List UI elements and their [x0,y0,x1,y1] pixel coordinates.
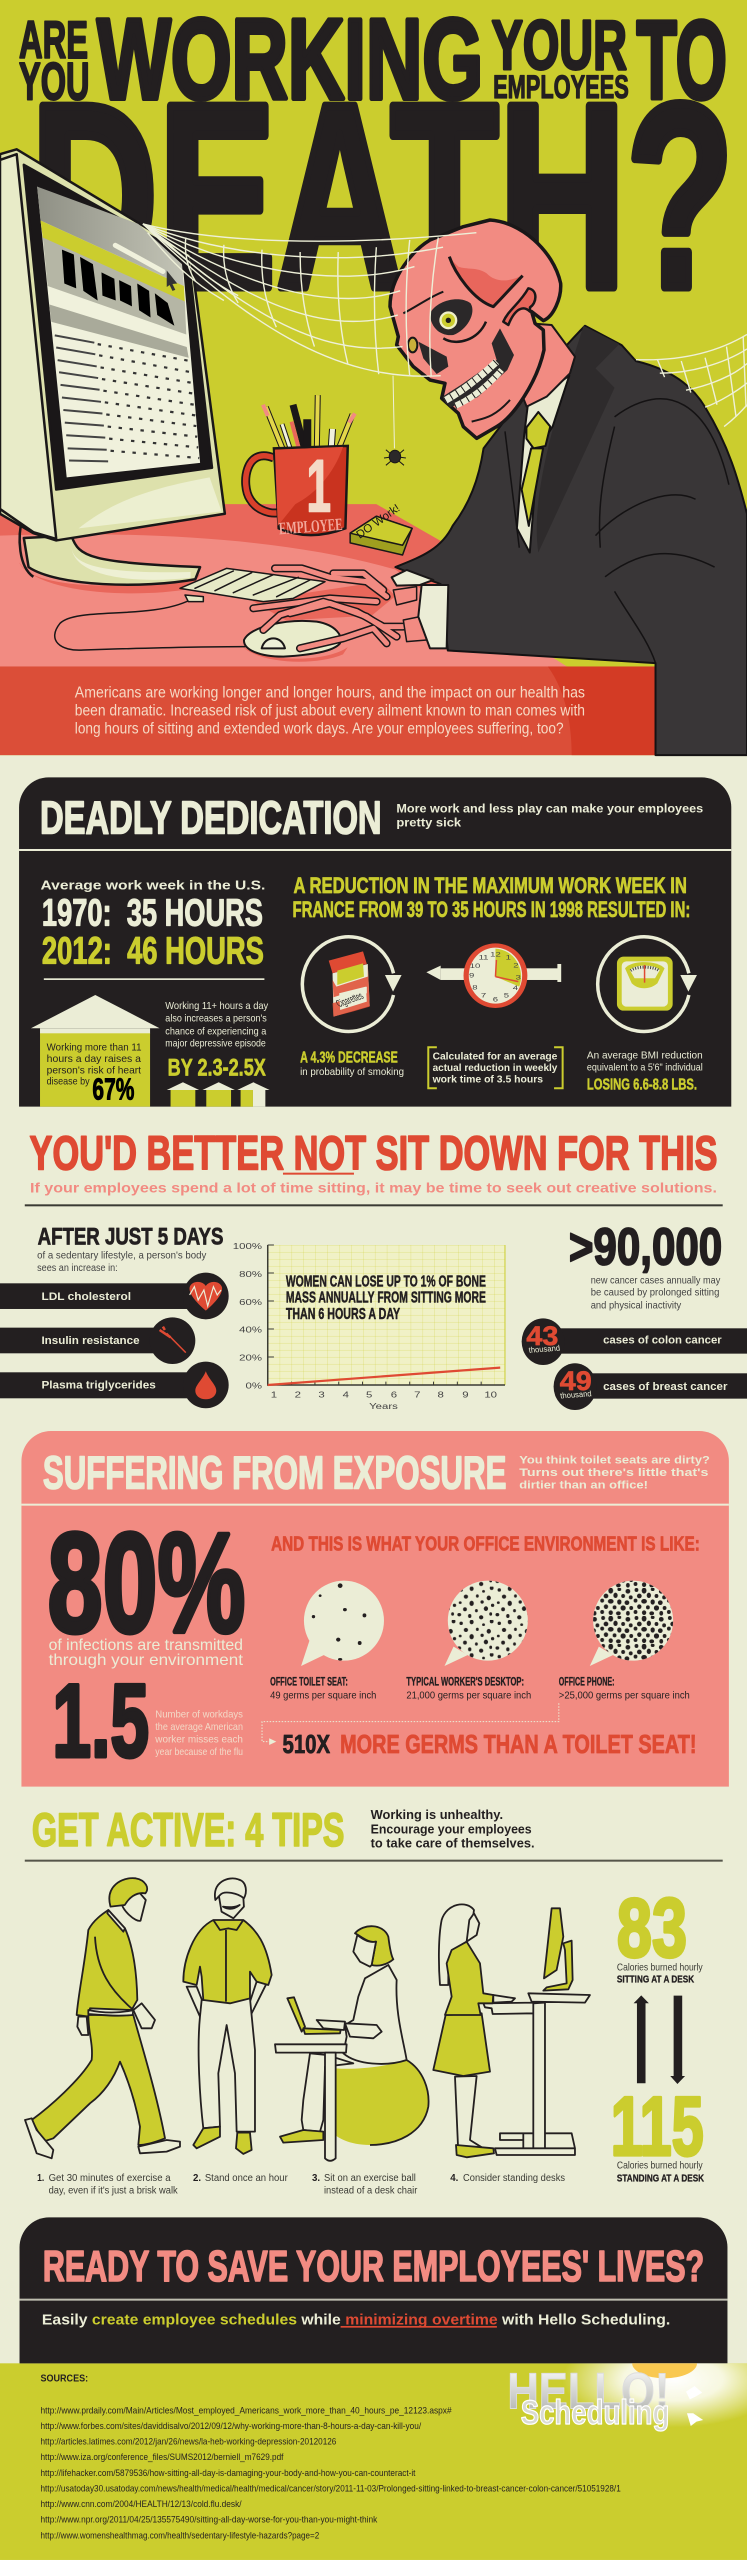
skull and neck [390,220,575,438]
icon: sticky note stack: DO Work! [355,502,402,541]
intro text: long hours of sitting and extended work days. Are your employees suffering, too? [75,720,564,737]
icon: clock with double arrow: 6 [493,996,499,1003]
cancer text: and physical inactivity [591,1299,682,1311]
sources list: http://www.npr.org/2011/04/25/135575490/sitting-all-day-worse-for-you-than-you-might-think [40,2515,377,2525]
intro text: Americans are working longer and longer hours, and the impact on our health has [75,684,585,702]
tips captions: Consider standing desks [463,2171,565,2183]
chart: bone mass loss: Years [369,1402,398,1411]
icon: clock with double arrow: 4 [513,984,519,992]
chart: bone mass loss: 3 [318,1391,325,1400]
ball outline [370,2060,429,2145]
flu text: the average American [155,1721,243,1732]
depression text: Working 11+ hours a day [165,1000,269,1011]
intro text [75,684,585,737]
sources list: http://www.cnn.com/2004/HEALTH/12/13/cold.flu.desk/ [40,2500,242,2509]
icon: clock with double arrow [426,943,561,1008]
blouse [445,1942,493,2015]
upper teeth [445,362,497,401]
house arrow: heart disease: disease by [47,1075,90,1087]
bubble captions: OFFICE PHONE: [559,1676,615,1689]
bubble captions [270,1676,690,1701]
cta underline [341,2326,497,2328]
tips captions: Get 30 minutes of exercise a [49,2171,171,2183]
chart: bone mass loss: 9 [462,1391,469,1400]
bar: breast cancer [554,1363,747,1410]
face [353,1935,376,1967]
icon: pencil mug: EMPLOYEE [278,515,343,538]
standing man trousers [199,1998,255,2132]
sources list: http://www.forbes.com/sites/daviddisalvo/2012/09/12/why-working-more-than-8-hours-a-day-can-kill-you/ [40,2422,422,2431]
caption: smoking: A 4.3% DECREASE [300,1049,398,1066]
icon: clock with double arrow: 2 [513,962,519,969]
bar: breast cancer: thousand [560,1390,592,1401]
icon: clock with double arrow: 1 [506,954,511,961]
after 5 days text: of a sedentary lifestyle, a person's body [37,1249,207,1261]
figure heads [109,1878,246,1921]
cancer text [591,1274,721,1311]
tie [522,412,550,526]
hand [493,1995,515,2003]
divider [19,849,731,851]
depression text: chance of experiencing a [165,1025,266,1037]
chart: bone mass loss: MASS ANNUALLY FROM SITTING MORE [286,1290,486,1307]
second eye [408,338,417,352]
icon: phone germs bubble [590,1581,673,1666]
walking man arm line [95,1937,133,2010]
icon: monitor [0,149,225,585]
standing man shirt details [213,1920,243,2002]
sources heading: SOURCES: [40,2373,88,2384]
icon: cigarette pack in cycle arrow [302,937,402,1031]
icon: clock with double arrow: 12 [490,951,501,958]
chart: bone mass loss: 7 [414,1391,421,1400]
standing monitor [544,1908,563,1978]
flu text: Number of workdays [155,1708,243,1720]
panel: deadly dedication: DEADLY DEDICATION [40,793,382,844]
depression multiplier: BY 2.3-2.5X [168,1055,266,1081]
bubble captions: 21,000 germs per square inch [406,1689,531,1701]
skull shape [390,220,561,438]
keyboard, mouse, skeleton hands and cuffs [55,568,448,657]
sources list: http://www.prdaily.com/Main/Articles/Most_employed_Americans_work_more_than_40_hours_pe_12123.aspx# [40,2406,452,2416]
ear hole [503,288,535,325]
work week stats: 2012: 46 HOURS [42,929,264,971]
footer olive background [0,2363,747,2560]
bubble captions: 49 germs per square inch [270,1689,376,1701]
temple line [403,292,443,313]
jaw line [472,400,510,422]
icon: mouse [244,621,341,657]
figure: woman on ball and woman at standing desk [275,1904,590,2161]
walking man collar [107,1910,125,1932]
sources list [40,2406,621,2541]
subheading: Encourage your employees [371,1823,532,1837]
section: get active: GET ACTIVE: 4 TIPS [32,1804,344,1857]
standing shoes [456,2145,494,2157]
chart: bone mass loss: 6 [391,1391,398,1400]
subheading: dirtier than an office! [519,1478,648,1491]
subheading: Turns out there's little that's [519,1465,709,1478]
seated legs [302,2053,353,2132]
caption: bracketed note: Calculated for an average [433,1050,557,1062]
standing man shirt [183,1920,272,2003]
hero panel [0,0,747,755]
eye [439,311,457,329]
neck vertebrae [520,323,575,407]
brow shade [448,257,523,307]
small arrows [167,1082,270,1107]
mouse cord [55,600,245,650]
upper hand bones [253,568,403,648]
desk [0,504,567,666]
icon: cigarette pack in cycle arrow: Cigarettes [333,990,366,1009]
chart: bone mass loss: 8 [437,1391,444,1400]
work week stats [40,879,265,971]
suit [395,326,747,755]
flu text: worker misses each [154,1734,243,1745]
tips captions: 3. [312,2171,320,2183]
intro band [0,666,656,755]
chart: bone mass loss: 60% [239,1298,262,1307]
figure: walking man and standing man [25,1910,272,2158]
stat: 83 calories: 83 [617,1880,687,1974]
divider [21,1504,729,1506]
stat text [49,1637,244,1669]
walking man shoes [25,2118,180,2158]
caption: smoking [300,1049,404,1077]
standing man shoes [193,2127,252,2154]
icon: toilet seat germs bubble [301,1581,384,1666]
icon: clock with double arrow: 10 [470,962,481,970]
tips captions: 1. [37,2171,44,2183]
title: ARE [19,12,88,70]
wrists [393,587,427,642]
work week stats: Average work week in the U.S. [40,879,265,893]
title: YOU [19,53,90,111]
chart: bone mass loss [233,1243,505,1411]
walking man hand [133,2003,155,2028]
chart: bone mass loss: 0% [246,1382,262,1391]
tips captions: Stand once an hour [205,2171,288,2183]
icon: clock with double arrow: 7 [481,992,487,999]
standing legs [455,2076,483,2153]
chart: bone mass loss: 5 [366,1391,373,1400]
icon: sticky note stack [350,502,412,555]
rule [25,1860,723,1862]
chart: bone mass loss: 80% [239,1270,262,1279]
work week stats: 1970: 35 HOURS [42,891,263,933]
title: EMPLOYEES [493,69,629,105]
caption: bracketed note: work time of 3.5 hours [432,1074,543,1085]
house arrow: heart disease: Working more than 11 [47,1042,142,1053]
footer [0,2217,747,2560]
sources list: http://www.iza.org/conference_files/SUMS2012/berniell_m7629.pdf [40,2453,284,2462]
walking man trousers [32,2015,165,2145]
standing desk [483,1993,590,2155]
rule [44,978,264,980]
chart: bone mass loss: 1 [271,1391,277,1400]
subheading: Working is unhealthy. [371,1808,503,1822]
bar: plasma triglycerides: Plasma triglycerides [41,1378,156,1391]
panel: call to action [20,2217,727,2363]
subheading [396,803,703,830]
caption: bracketed note: actual reduction in weekly [433,1062,558,1073]
panel: suffering from exposure [21,1431,729,1787]
section: get active [25,1804,723,2196]
house arrow: heart disease: 67% [92,1073,134,1107]
tips captions: instead of a desk chair [324,2184,418,2196]
after 5 days text: sees an increase in: [37,1261,118,1273]
tips captions: Sit on an exercise ball [324,2171,416,2183]
exercise ball [324,2060,429,2145]
standing man arms [187,1982,267,2017]
chart: bone mass loss: 10 [484,1391,498,1400]
bar: LDL cholesterol [0,1273,229,1319]
bar: insulin resistance: Insulin resistance [41,1333,140,1346]
shirt [517,376,569,553]
walking man sweater [77,1910,137,2017]
spider thread [393,376,394,448]
hair [355,1926,393,1966]
cta text: Easily create employee schedules while minimizing overtime with Hello Scheduling. [42,2311,670,2328]
arrow: down [670,1996,685,2084]
subheading [371,1808,535,1851]
cobweb [143,224,476,376]
tips captions [37,2171,565,2196]
flu text: year because of the flu [155,1746,243,1757]
brow line [449,257,523,307]
seated shoe [280,2130,323,2143]
panel: suffering from exposure: 1.5 [52,1663,149,1779]
icon: clock with double arrow: 8 [472,984,478,991]
chart: bone mass loss: 20% [239,1354,262,1363]
hero olive background [0,0,747,755]
bubble captions: TYPICAL WORKER'S DESKTOP: [406,1676,524,1689]
laptop [287,1997,341,2034]
icon: scale in cycle arrow [598,937,697,1031]
bar: LDL cholesterol: LDL cholesterol [41,1289,131,1302]
stat: 115 calories [611,2080,704,2184]
tips captions: day, even if it's just a brisk walk [49,2184,178,2196]
chart: bone mass loss: 2 [295,1391,301,1400]
caption: smoking: in probability of smoking [300,1066,404,1077]
arrow: up [634,1995,649,2083]
standing hair [439,1904,474,1985]
rule [25,1204,723,1206]
tips captions: 4. [450,2171,458,2183]
lower teeth [455,370,502,406]
title: YOUR [492,6,627,84]
icon: clock with double arrow: 5 [504,992,510,999]
section: sitting [0,1126,747,1411]
tips captions: 2. [193,2171,201,2183]
subheading: pretty sick [396,817,462,830]
caption: bracketed note [428,1047,563,1088]
sources list: http://lifehacker.com/5879536/how-sitting-all-day-is-damaging-your-body-and-how-you-can-counteract-it [40,2469,416,2478]
right cobweb [636,334,747,427]
icon: pencil mug: 1 [306,444,331,527]
sources list: http://www.womenshealthmag.com/health/sedentary-lifestyle-hazards?page=2 [40,2531,319,2541]
panel: deadly dedication [19,777,731,1107]
icon: clock with double arrow: 3 [516,974,521,981]
after 5 days text [37,1249,207,1273]
chart: bone mass loss: WOMEN CAN LOSE UP TO 1% OF BONE [286,1274,486,1291]
bubble captions: OFFICE TOILET SEAT: [270,1676,348,1689]
icon: pencil mug [246,395,355,538]
underline [283,1173,354,1175]
desk [275,2044,347,2053]
callout: 510x: 510X [283,1729,331,1759]
house arrow: heart disease [31,995,160,1107]
cobwebs and spider [143,224,747,465]
icon: keyboard [180,568,325,602]
desk leg [325,2053,336,2161]
stat text: of infections are transmitted [49,1637,243,1654]
house arrow: heart disease: person's risk of heart [47,1064,141,1076]
sources list: http://articles.latimes.com/2012/jan/26/news/la-heb-working-depression-20120126 [40,2437,336,2447]
stat text: through your environment [49,1652,244,1669]
bar: insulin resistance [0,1317,195,1364]
france heading [293,873,690,922]
bar: colon cancer: 43 [526,1321,558,1351]
coat [343,1965,407,2064]
depression text: major depressive episode [165,1038,266,1049]
forearm [317,2020,382,2038]
icon: clock with double arrow: 9 [469,972,475,979]
skirt [433,2013,490,2076]
bar: plasma triglycerides [0,1362,229,1408]
flu text [154,1708,243,1757]
mouth [443,328,514,407]
walking man waistband [88,2010,133,2016]
panel background [19,777,731,1107]
chart: bone mass loss: 4 [343,1391,350,1400]
standing face [467,1913,479,1942]
icon: spider [384,450,406,465]
depression text [165,1000,269,1049]
bar: colon cancer: thousand [528,1344,561,1355]
eye socket [430,299,472,335]
caption: BMI [587,1049,703,1093]
shirt cuffs [392,570,448,648]
icon: clock with double arrow: 11 [479,954,489,961]
stat: 83 calories [617,1880,703,1985]
icon: desktop germs bubble [444,1581,528,1666]
intro text: been dramatic. Increased risk of just about every ailment known to man comes with [75,702,585,719]
subheading [519,1453,710,1491]
bar: colon cancer [522,1318,747,1365]
chart: bone mass loss: 40% [239,1326,262,1335]
after 5 days heading: AFTER JUST 5 DAYS [38,1224,223,1250]
chart: bone mass loss: THAN 6 HOURS A DAY [286,1306,400,1323]
bar: breast cancer: 49 [560,1366,592,1396]
under-eye line [443,322,486,342]
depression text: also increases a person's [165,1013,267,1024]
lower hand bones [263,602,403,648]
subheading: to take care of themselves. [371,1837,535,1851]
monitor stand [543,1941,573,1991]
nose [418,342,448,374]
chart: bone mass loss: 100% [233,1243,262,1251]
panel: suffering from exposure: 80% [48,1504,245,1662]
walking man back hand [77,2017,88,2035]
panel background [21,1431,729,1787]
dotted arrow [262,1703,559,1745]
house arrow: heart disease: hours a day raises a [47,1053,141,1064]
